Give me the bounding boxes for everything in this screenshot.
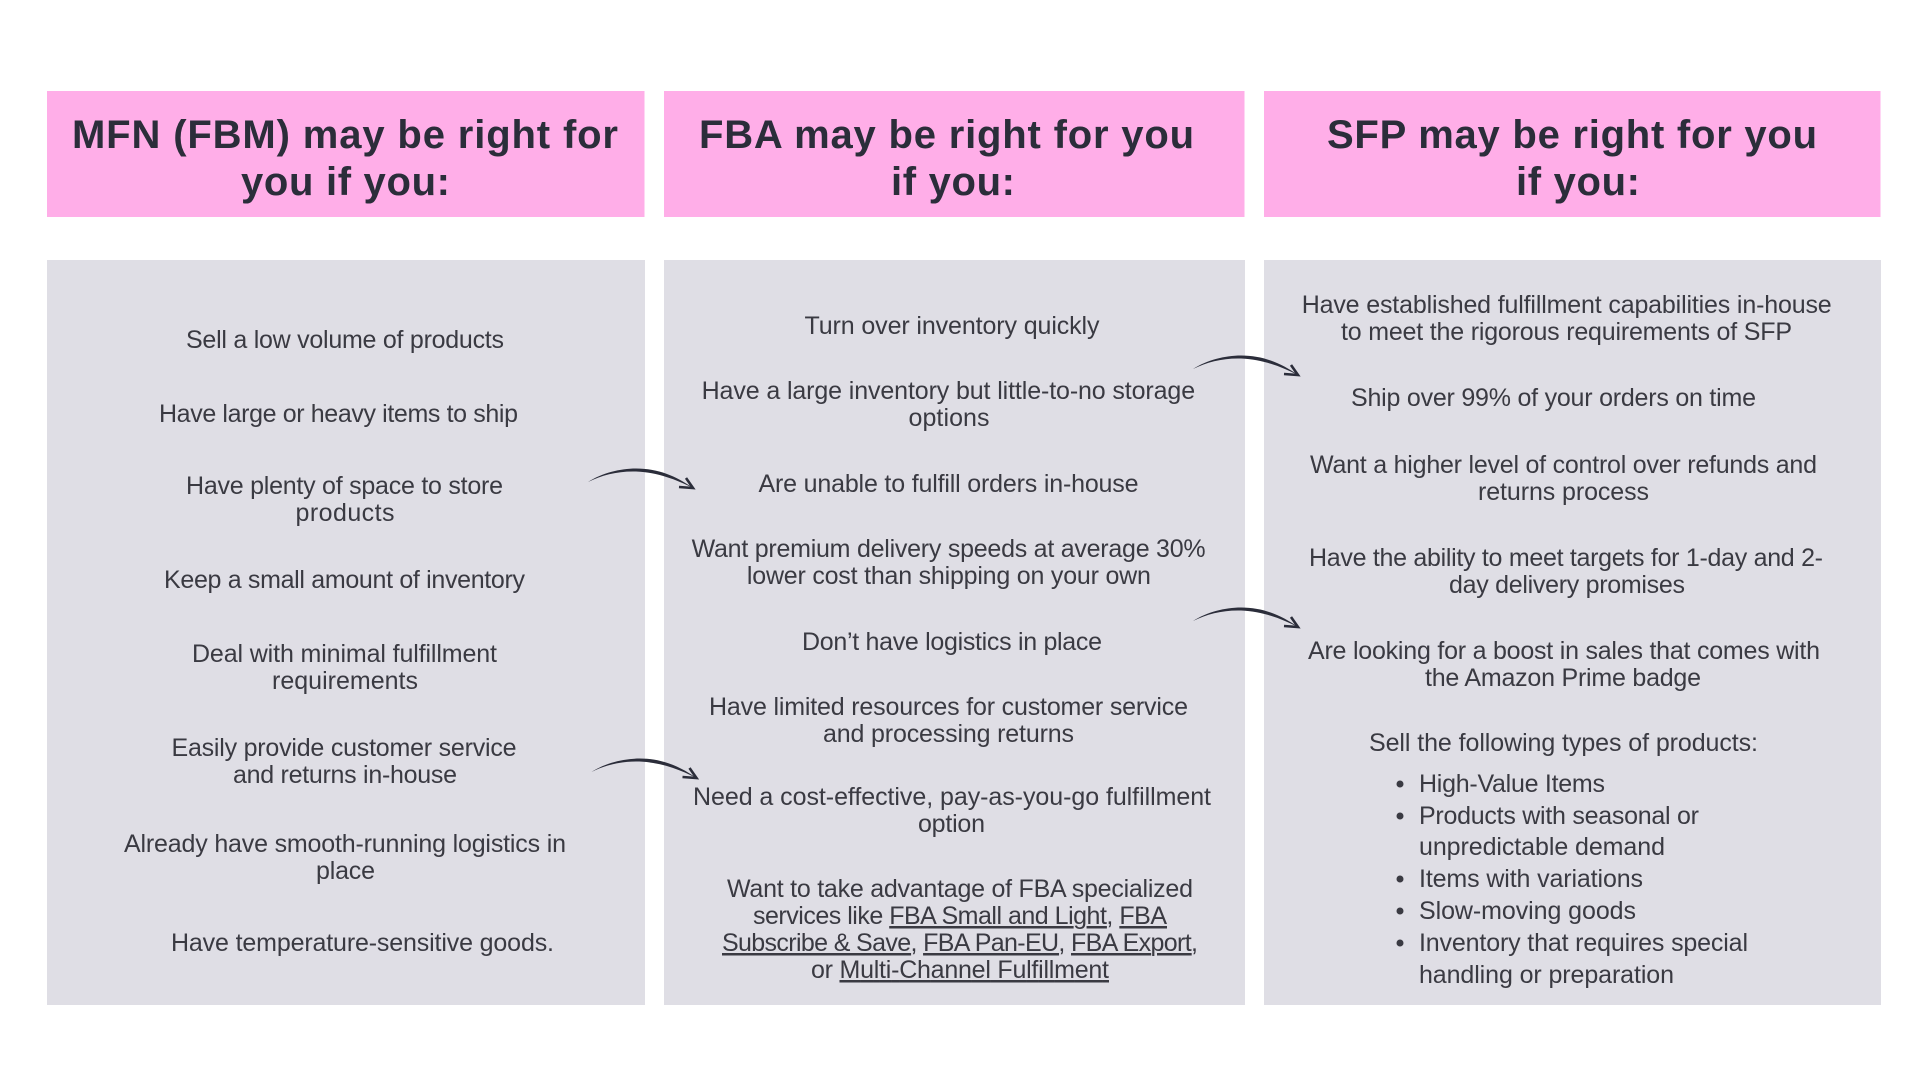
- panel: MFN (FBM) criteria: requirements: [272, 667, 418, 695]
- panel: MFN (FBM) criteria: products: [296, 499, 394, 527]
- header: MFN (FBM): [47, 91, 644, 217]
- panel: SFP criteria: Want a higher level of control over refunds and: [1310, 451, 1817, 479]
- panel: FBA criteria: lower cost than shipping on your own: [747, 562, 1151, 590]
- panel: FBA criteria: Want to take advantage of FBA specialized: [727, 875, 1193, 903]
- header: MFN (FBM): you if you:: [241, 160, 450, 204]
- header: SFP: if you:: [1516, 160, 1640, 204]
- panel: FBA criteria: Subscribe & Save, FBA Pan-EU, FBA Export,: [722, 929, 1198, 957]
- panel: SFP criteria: day delivery promises: [1449, 571, 1685, 599]
- panel: FBA criteria: and processing returns: [823, 720, 1074, 748]
- panel: MFN (FBM) criteria: place: [316, 857, 375, 885]
- panel: SFP criteria: Sell the following types of products:: [1369, 729, 1758, 757]
- panel: FBA criteria: services like FBA Small and Light, FBA: [753, 902, 1167, 930]
- panel: SFP criteria: the Amazon Prime badge: [1425, 664, 1701, 692]
- panel: SFP criteria: to meet the rigorous requirements of SFP: [1341, 318, 1792, 346]
- panel: FBA criteria: Want premium delivery speeds at average 30%: [692, 535, 1206, 563]
- panel: FBA criteria: Have a large inventory but little-to-no storage: [702, 377, 1195, 405]
- panel: FBA criteria: [664, 260, 1245, 1005]
- panel: MFN (FBM) criteria: and returns in-house: [233, 761, 457, 789]
- panel: SFP criteria: Slow-moving goods: [1419, 897, 1636, 925]
- panel: SFP criteria: handling or preparation: [1419, 961, 1674, 989]
- panel: FBA criteria: Have limited resources for customer service: [709, 693, 1188, 721]
- panel: MFN (FBM) criteria: Have plenty of space to store: [186, 472, 503, 500]
- panel: SFP criteria: Inventory that requires special: [1419, 929, 1748, 957]
- arrow: FBA to SFP lower: [1193, 608, 1298, 627]
- panel: MFN (FBM) criteria: [47, 260, 645, 1005]
- header: SFP: SFP may be right for you: [1327, 113, 1817, 157]
- header: FBA: if you:: [891, 160, 1015, 204]
- panel: SFP criteria: unpredictable demand: [1419, 833, 1665, 861]
- panel: FBA criteria: Are unable to fulfill orders in-house: [758, 470, 1138, 498]
- panel: SFP criteria: Have established fulfillment capabilities in-house: [1302, 291, 1832, 319]
- panel: FBA criteria: Don’t have logistics in place: [802, 628, 1102, 656]
- panel: SFP criteria: returns process: [1478, 478, 1649, 506]
- arrow: MFN to FBA upper: [588, 468, 693, 488]
- panel: MFN (FBM) criteria: Sell a low volume of products: [186, 326, 504, 354]
- panel: SFP criteria: Are looking for a boost in sales that comes with: [1308, 637, 1820, 665]
- header: SFP: [1264, 91, 1880, 217]
- panel: SFP criteria: Items with variations: [1419, 865, 1643, 893]
- arrow: FBA to SFP upper: [1193, 356, 1298, 375]
- panel: SFP criteria: Ship over 99% of your orders on time: [1351, 384, 1756, 412]
- panel: MFN (FBM) criteria: Already have smooth-running logistics in: [124, 830, 566, 858]
- panel: MFN (FBM) criteria: Deal with minimal fulfillment: [192, 640, 497, 668]
- panel: SFP criteria: Products with seasonal or: [1419, 802, 1699, 830]
- panel: MFN (FBM) criteria: Keep a small amount of inventory: [164, 566, 526, 594]
- header: FBA: FBA may be right for you: [699, 113, 1194, 157]
- panel: MFN (FBM) criteria: Have large or heavy items to ship: [159, 400, 518, 428]
- panel: SFP criteria: High-Value Items: [1419, 770, 1605, 798]
- arrow: MFN to FBA lower: [592, 758, 696, 778]
- panel: FBA criteria: options: [908, 404, 990, 432]
- panel: MFN (FBM) criteria: Have temperature-sensitive goods.: [171, 929, 554, 957]
- panel: FBA criteria: or Multi-Channel Fulfillment: [811, 956, 1109, 984]
- panel: SFP criteria: [1264, 260, 1881, 1005]
- panel: FBA criteria: option: [918, 810, 985, 838]
- panel: FBA criteria: Turn over inventory quickly: [804, 312, 1100, 340]
- panel: MFN (FBM) criteria: Easily provide customer service: [172, 734, 516, 762]
- panel: FBA criteria: Need a cost-effective, pay-as-you-go fulfillment: [693, 783, 1211, 811]
- header: FBA: [664, 91, 1244, 217]
- panel: SFP criteria: Have the ability to meet targets for 1-day and 2-: [1309, 544, 1823, 572]
- header: MFN (FBM): MFN (FBM) may be right for: [72, 113, 618, 157]
